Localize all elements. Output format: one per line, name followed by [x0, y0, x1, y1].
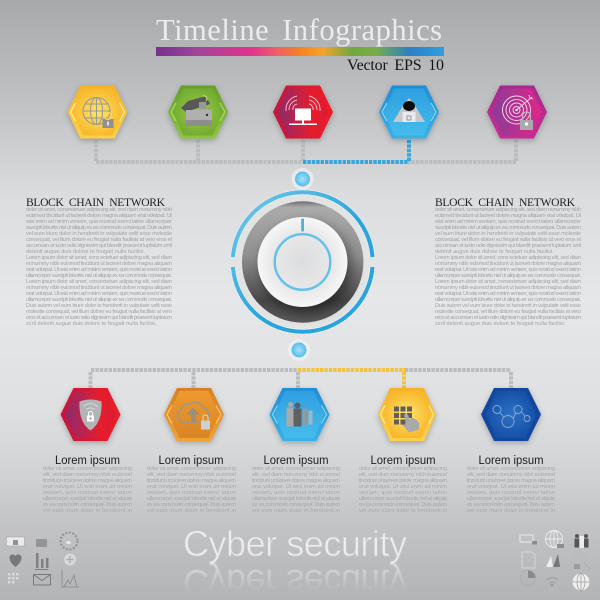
right body text: zzril delenit augue duis dolore te feugait nulla facilisi. [435, 321, 566, 327]
icon: plus [64, 554, 76, 566]
column 2 text: tincidunt ut laoreet dolore magna aliquam [147, 478, 236, 484]
left body text: nonummy nibh euismod tincidunt ut laoreet dolore magna aliquam [26, 261, 172, 267]
dark dial [242, 201, 363, 323]
left body text: wisi enim ad minim veniam, quis nostrud exerci tation ullamcorper [25, 219, 172, 225]
left heading: BLOCK CHAIN NETWORK [26, 196, 166, 209]
column 2 text [147, 466, 236, 514]
hexagon: people [270, 388, 330, 441]
column 3 text: erat volutpat. Ut wisi enim ad minim [252, 484, 340, 490]
right body text: euismod tincidunt ut laoreet dolore magna aliquam erat volutpat. Ut [435, 213, 581, 219]
bottom-left icon set [6, 532, 79, 587]
column 5 text: ex ea commodo consequat. Duis autem [467, 502, 555, 508]
right body text: consequat, vel illum dolore eu feugiat nulla facilisis at vero eros et [435, 237, 581, 243]
column 3 text: vel eum iriure dolor in hendrerit in [252, 508, 340, 514]
title: Timeline Infographics [156, 13, 442, 47]
column 3 text: dolor sit amet, consectetuer adipiscing [252, 466, 340, 472]
left body text: consequat, vel illum dolore eu feugiat nulla facilisis at vero eros et [26, 237, 172, 243]
column 3 text [252, 466, 340, 514]
icon: document [522, 552, 535, 568]
right body text: dolor sit amet, consectetuer adipiscing elit, sed diam nonummy nibh [435, 207, 581, 213]
hexagon: credit cards [168, 86, 228, 138]
hexagon: keypad [378, 388, 436, 441]
power symbol [275, 218, 330, 290]
column 4 text: tincidunt ut laoreet dolore magna aliquam [359, 478, 447, 484]
subtitle: Vector EPS 10 [347, 57, 444, 74]
column 4 text: veniam, quis nostrud exerci tation [359, 490, 447, 496]
column 3 [252, 453, 340, 514]
column 3 text: veniam, quis nostrud exerci tation [252, 490, 340, 496]
right body text: erat volutpat. Ut wisi enim ad minim veniam, quis nostrud exerci tation [435, 291, 581, 297]
column 5 text: veniam, quis nostrud exerci tation [467, 490, 555, 496]
icon: heart [9, 555, 22, 567]
left body text: molestie consequat, vel illum dolore eu feugiat nulla facilisis at vero [26, 309, 172, 315]
right body text: ullamcorper suscipit lobortis nisl ut aliquip ex ea commodo consequat. [435, 297, 581, 303]
right body text: nonummy nibh euismod tincidunt ut laoreet dolore magna aliquam [435, 261, 581, 267]
column 5 text [467, 466, 555, 514]
bottom node [288, 339, 310, 361]
right body text: wisi enim ad minim veniam, quis nostrud exerci tation ullamcorper [434, 219, 581, 225]
icon: wifi [547, 578, 558, 586]
icon: tablet [520, 535, 537, 544]
top connector lines [96, 140, 516, 162]
column 2 heading: Lorem ipsum [158, 453, 224, 467]
column 1 text: veniam, quis nostrud exerci tation [43, 490, 132, 496]
right body text: accumsan et iusto odio dignissim qui blandit praesent luptatum zzril [435, 243, 581, 249]
column 1 text: ullamcorper suscipit lobortis nisl ut aliquip [43, 496, 132, 502]
icon: gear [60, 532, 78, 550]
column 1 text [43, 466, 132, 514]
left body text: vel eum iriure dolor in hendrerit in vulputate velit esse molestie [26, 231, 172, 237]
icon: globe 2 [572, 574, 590, 590]
column 5 text: ullamcorper suscipit lobortis nisl ut aliquip [467, 496, 555, 502]
left body text: zzril delenit augue duis dolore te feugait nulla facilisi. [26, 321, 157, 327]
right body text: suscipit lobortis nisl ut aliquip ex ea commodo consequat. Duis autem [435, 225, 581, 231]
column 4 text: elit, sed diam nonummy nibh euismod [359, 472, 447, 478]
column 3 text: tincidunt ut laoreet dolore magna aliquam [252, 478, 340, 484]
column 2 text: ullamcorper suscipit lobortis nisl ut aliquip [147, 496, 236, 502]
icon: bars [35, 553, 48, 570]
rainbow title bar [156, 47, 444, 56]
column 5 [467, 453, 555, 514]
icon: people [574, 534, 588, 548]
right body text: eros et accumsan et iusto odio dignissim qui blandit praesent luptatum [435, 315, 581, 321]
icon: connected nodes [493, 406, 530, 428]
icon: globe and padlock [83, 98, 114, 128]
left body text: delenit augue duis dolore te feugait nulla facilisi. [26, 249, 145, 255]
icon: chart [62, 570, 79, 587]
column 2 text: veniam, quis nostrud exerci tation [147, 490, 236, 496]
icon: laptop and signal [286, 96, 320, 125]
icon: envelope [34, 574, 50, 585]
column 3 heading: Lorem ipsum [264, 453, 328, 467]
column 2 text: ex ea commodo consequat. Duis autem [147, 502, 236, 508]
knob [258, 217, 348, 307]
column 5 text: tincidunt ut laoreet dolore magna aliquam [467, 478, 555, 484]
column 5 text: erat volutpat. Ut wisi enim ad minim [467, 484, 555, 490]
column 4 [359, 453, 447, 514]
left body text: Lorem ipsum dolor sit amet, cons ectetuer adipiscing elit, sed diam [26, 255, 172, 261]
right body text: nonummy nibh euismod tincidunt ut laoreet dolore magna aliquam [435, 285, 581, 291]
column 5 heading: Lorem ipsum [478, 453, 544, 467]
column 4 text: ex ea commodo consequat. Duis autem [359, 502, 447, 508]
column 5 text: vel eum iriure dolor in hendrerit in [467, 508, 555, 514]
left body text: accumsan et iusto odio dignissim qui blandit praesent luptatum zzril [26, 243, 172, 249]
column 4 text: dolor sit amet, consectetuer adipiscing [359, 466, 447, 472]
column 2 text: vel eum iriure dolor in hendrerit in [147, 508, 236, 514]
icon: user [393, 98, 425, 122]
hexagon: wifi laptop [273, 86, 333, 138]
right body text [434, 207, 581, 327]
column 2 [147, 453, 236, 514]
left body text: dolor sit amet, consectetuer adipiscing elit, sed diam nonummy nibh [26, 207, 172, 213]
column 1 text: ex ea commodo consequat. Duis autem [43, 502, 132, 508]
left body text: eros et accumsan et iusto odio dignissim qui blandit praesent luptatum [26, 315, 172, 321]
column 2 text: erat volutpat. Ut wisi enim ad minim [147, 484, 236, 490]
right body text: vel eum iriure dolor in hendrerit in vulputate velit esse molestie [435, 231, 581, 237]
right body text: Duis autem vel eum iriure dolor in hendrerit in vulputate velit esse [435, 303, 581, 309]
column 4 text: erat volutpat. Ut wisi enim ad minim [359, 484, 447, 490]
icon: mountains chart [546, 554, 560, 567]
hexagon: target with lock [487, 86, 547, 138]
icon: photo [36, 539, 47, 547]
hexagon: cloud upload [164, 388, 224, 441]
icon: shield with lock [79, 400, 102, 430]
icon: pie chart [520, 570, 536, 586]
left body text [25, 207, 172, 327]
column 3 text: ullamcorper suscipit lobortis nisl ut aliquip [252, 496, 340, 502]
icon: cloud with lock [178, 402, 210, 430]
right body text: Lorem ipsum dolor sit amet, cons ectetuer adipiscing elit, sed diam [435, 255, 581, 261]
right body text: erat volutpat. Ut wisi enim ad minim veniam, quis nostrud exerci tation [435, 267, 581, 273]
icon: magnifier [574, 553, 591, 570]
bottom connector lines [90, 370, 511, 388]
left body text: nonummy nibh euismod tincidunt ut laoreet dolore magna aliquam [26, 285, 172, 291]
column 2 text: elit, sed diam nonummy nibh euismod [147, 472, 236, 478]
hexagon: globe with lock [68, 86, 128, 138]
column 1 [43, 453, 132, 514]
column 4 text: vel eum iriure dolor in hendrerit in [359, 508, 447, 514]
left body text: Duis autem vel eum iriure dolor in hendrerit in vulputate velit esse [26, 303, 172, 309]
column 4 text [359, 466, 447, 514]
left body text: erat volutpat. Ut wisi enim ad minim veniam, quis nostrud exerci tation [26, 267, 172, 273]
outer ring [233, 192, 372, 332]
icon: group of people [286, 402, 312, 426]
left body text: Lorem ipsum dolor sit amet, consectetuer adipiscing elit, sed diam [26, 279, 172, 285]
column 3 text: ex ea commodo consequat. Duis autem [252, 502, 340, 508]
icon: cards with lock [181, 96, 212, 126]
column 4 heading: Lorem ipsum [370, 453, 436, 467]
left body text: euismod tincidunt ut laoreet dolore magna aliquam erat volutpat. Ut [26, 213, 172, 219]
right body text: Lorem ipsum dolor sit amet, consectetuer adipiscing elit, sed diam [435, 279, 581, 285]
right body text: delenit augue duis dolore te feugait nulla facilisi. [435, 249, 554, 255]
column 2 text: dolor sit amet, consectetuer adipiscing [147, 466, 236, 472]
hexagon: hooded user with lock [379, 86, 439, 138]
icon: lock card [6, 537, 24, 546]
icon: keypad and hand [394, 406, 419, 432]
bottom-right icon set [520, 530, 591, 590]
central power dial [233, 168, 372, 361]
column 4 text: ullamcorper suscipit lobortis nisl ut aliquip [359, 496, 447, 502]
column 5 text: dolor sit amet, consectetuer adipiscing [467, 466, 555, 472]
hexagon: shield [60, 388, 120, 441]
hexagon: network [481, 388, 541, 441]
footer title: Cyber security [183, 523, 407, 564]
column 5 text: elit, sed diam nonummy nibh euismod [467, 472, 555, 478]
left body text: suscipit lobortis nisl ut aliquip ex ea commodo consequat. Duis autem [26, 225, 172, 231]
column 1 text: erat volutpat. Ut wisi enim ad minim [43, 484, 132, 490]
top node [292, 168, 314, 190]
left body text: ullamcorper suscipit lobortis nisl ut aliquip ex ea commodo consequat. [26, 297, 172, 303]
icon: globe 1 [546, 530, 564, 548]
icon: dots [8, 573, 18, 584]
icon: target [502, 95, 533, 130]
column 3 text: elit, sed diam nonummy nibh euismod [252, 472, 340, 478]
right heading: BLOCK CHAIN NETWORK [435, 196, 576, 209]
left body text: ullamcorper suscipit lobortis nisl ut aliquip ex ea commodo consequat. [26, 273, 172, 279]
column 1 text: elit, sed diam nonummy nibh euismod [43, 472, 132, 478]
column 1 text: dolor sit amet, consectetuer adipiscing [43, 466, 132, 472]
right body text: ullamcorper suscipit lobortis nisl ut aliquip ex ea commodo consequat. [435, 273, 581, 279]
right body text: molestie consequat, vel illum dolore eu feugiat nulla facilisis at vero [435, 309, 581, 315]
column 1 text: tincidunt ut laoreet dolore magna aliquam [43, 478, 132, 484]
left body text: erat volutpat. Ut wisi enim ad minim veniam, quis nostrud exerci tation [26, 291, 172, 297]
column 1 heading: Lorem ipsum [55, 453, 120, 467]
column 1 text: vel eum iriure dolor in hendrerit in [43, 508, 132, 514]
